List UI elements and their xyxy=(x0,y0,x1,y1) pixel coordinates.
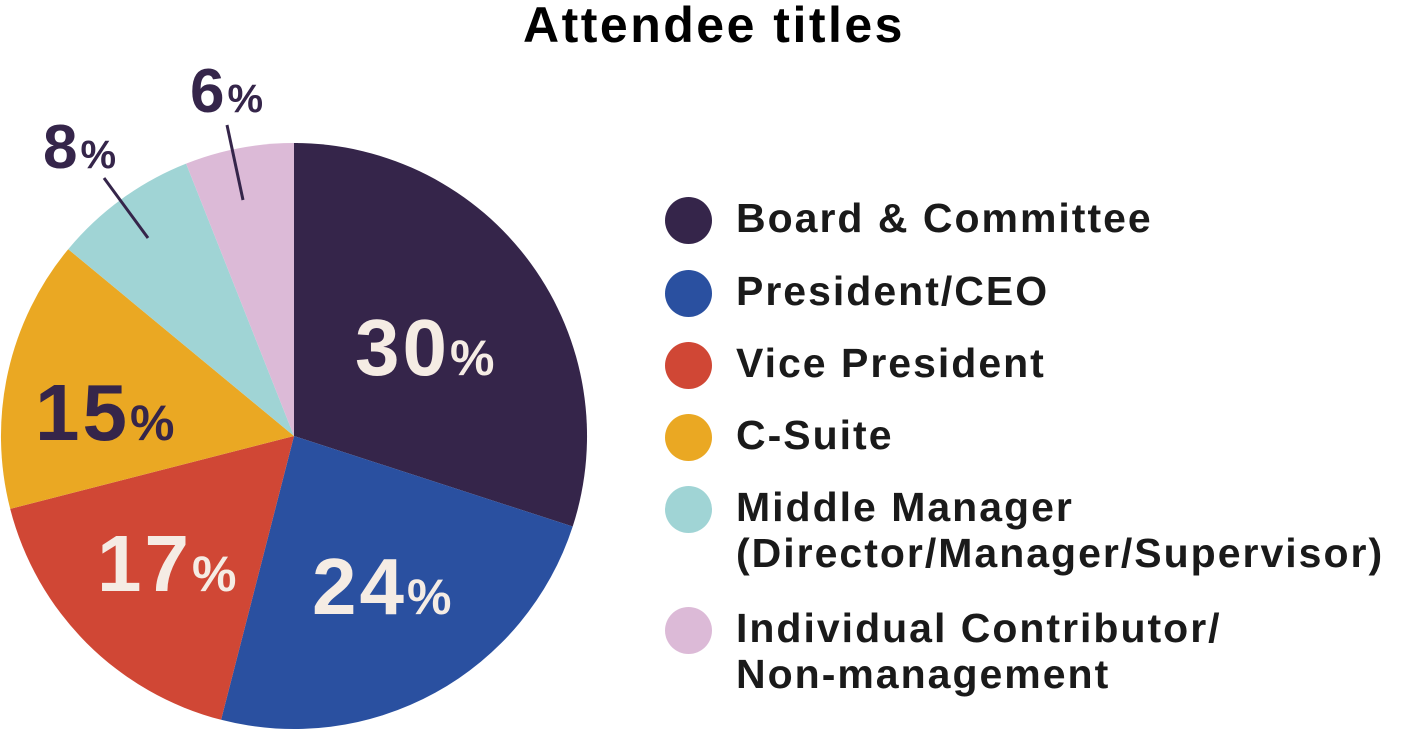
legend item: President/CEO xyxy=(665,268,1049,317)
legend: President/CEO xyxy=(736,268,1049,314)
percent labels: 8% xyxy=(43,113,119,182)
legend item: C-Suite xyxy=(665,412,894,461)
percent labels: 30% xyxy=(355,303,497,392)
legend: Board & Committee xyxy=(736,195,1153,241)
legend item: Vice President xyxy=(665,340,1046,389)
percent labels: 24% xyxy=(312,542,454,631)
legend item: Middle Manager xyxy=(665,484,1384,576)
percent labels xyxy=(35,57,497,631)
legend item: Board & Committee xyxy=(665,195,1153,244)
legend: C-Suite xyxy=(736,412,894,458)
legend item: Individual Contributor xyxy=(665,605,1222,697)
percent labels: 17% xyxy=(97,519,239,608)
percent labels: 15% xyxy=(35,368,177,457)
legend xyxy=(665,195,1384,697)
leader lines xyxy=(104,125,243,238)
legend: Individual Contributor/ xyxy=(736,605,1222,651)
legend: (Director/Manager/Supervisor) xyxy=(736,530,1384,576)
legend: Non-management xyxy=(736,651,1110,697)
percent labels: 6% xyxy=(190,57,266,126)
legend: Vice President xyxy=(736,340,1046,386)
legend: Middle Manager xyxy=(736,484,1074,530)
